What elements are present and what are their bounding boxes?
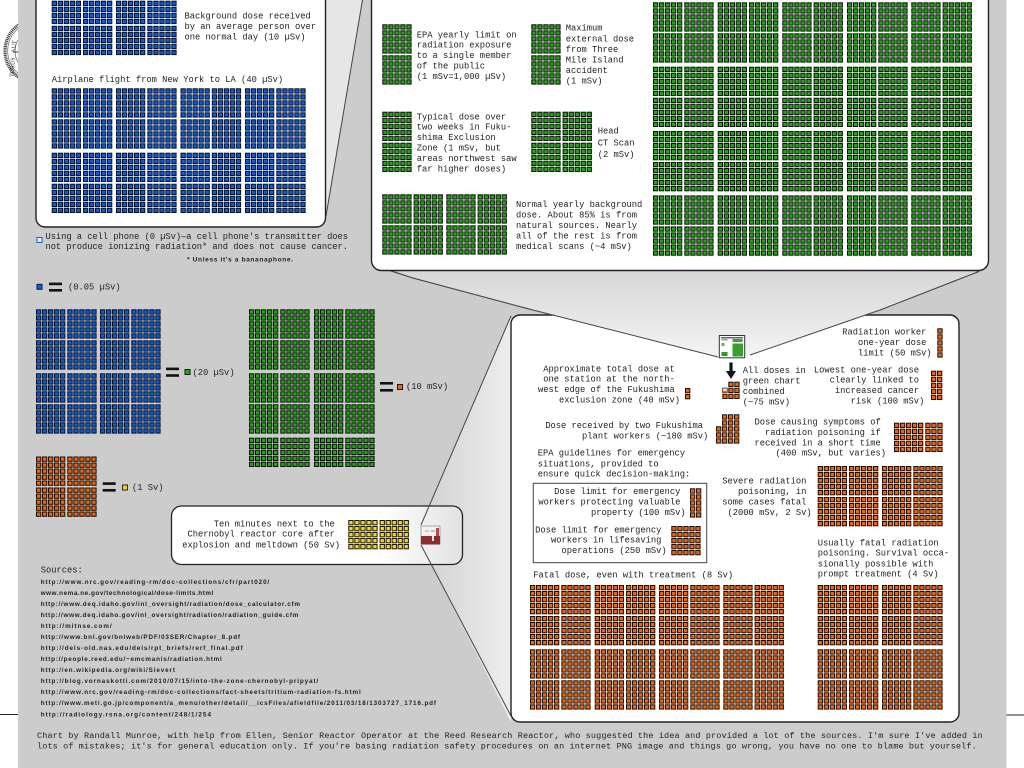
panel: green dose chart — [372, 0, 988, 270]
lifesaving text: workers in lifesaving — [551, 536, 661, 546]
Fukushima exclusion zone blocks — [383, 112, 411, 172]
north-west station text: exclusion zone (40 mSv) — [559, 395, 680, 405]
lifesaving cells — [672, 526, 700, 555]
normal yearly background text: medical scans (~4 mSv) — [516, 242, 632, 252]
Three Mile Island text: Mile Island — [566, 55, 624, 65]
all doses in green chart text: (~75 mSv) — [743, 397, 790, 407]
head CT blocks — [532, 112, 591, 172]
Fukushima exclusion zone text: two weeks in Fuku- — [417, 123, 511, 133]
severe poisoning text: some cases fatal — [722, 498, 806, 508]
severe poisoning blocks — [818, 466, 942, 526]
usually fatal text: poisoning. Survival occa- — [818, 549, 949, 559]
Chernobyl yellow blocks — [349, 520, 408, 549]
EPA limit text: EPA yearly limit on — [417, 30, 517, 40]
Fukushima exclusion zone text: Zone (1 mSv, but — [417, 144, 501, 154]
source URLs: www.nema.ne.gov/technological/dose-limits.html — [40, 590, 214, 597]
source URLs: http://www.nrc.gov/reading-rm/doc-collections/fact-sheets/tritium-radiation-fs.html — [41, 689, 361, 696]
symptoms text: received in a short time — [754, 438, 881, 448]
cancer risk text: increased cancer — [835, 386, 919, 396]
severe poisoning text: (2000 mSv, 2 Sv) — [728, 508, 812, 518]
fatal dose heading: Fatal dose, even with treatment (8 Sv) — [533, 571, 733, 581]
callout wedge: Chernobyl icon to orange panel — [421, 315, 511, 722]
cell phone note — [37, 232, 353, 252]
legend: 500 green cells equal one orange cell: (10 mSv) — [406, 382, 448, 392]
source URLs: http://people.reed.edu/~emcmanis/radiation.html — [41, 656, 222, 663]
usually fatal text: prompt treatment (4 Sv) — [818, 570, 939, 580]
worker limit text: limit (50 mSv) — [858, 348, 932, 358]
worker limit text: one-year dose — [858, 338, 926, 348]
callout wedge: base under green panel — [372, 265, 987, 357]
normal yearly background text: Normal yearly background — [516, 200, 642, 210]
usually fatal text: sionally possible with — [818, 559, 933, 569]
footnote: * Unless it's a bananaphone. — [187, 256, 293, 264]
source URLs: http://www.deq.idaho.gov/inl_oversight/radiation/radiation_guide.cfm — [41, 612, 299, 619]
normal yearly background blocks — [383, 195, 506, 254]
EPA limit text: (1 mSv=1,000 µSv) — [417, 72, 506, 82]
green chart combined cells — [723, 382, 739, 398]
symptoms cells — [894, 423, 942, 452]
plant workers text: Dose received by two Fukushima — [545, 421, 703, 431]
all doses in green chart text: green chart — [743, 376, 801, 386]
source URLs: http://dels-old.nas.edu/dels/rpt_briefs/rerf_final.pdf — [41, 645, 244, 652]
cancer risk cells — [932, 371, 942, 400]
legend: blue cell value — [37, 283, 121, 293]
EPA emergency guideline text: EPA guidelines for emergency — [538, 449, 685, 459]
Chernobyl text: explosion and meltdown (50 Sv) — [182, 540, 340, 550]
valuable property text: property (100 mSv) — [591, 508, 686, 518]
lifesaving text: operations (250 mSv) — [561, 546, 667, 556]
background dose text: one normal day (10 µSv) — [184, 32, 306, 42]
lifesaving text: Dose limit for emergency — [535, 525, 661, 535]
background dose text: by an average person over — [184, 22, 316, 32]
Chernobyl text: Chernobyl reactor core after — [187, 530, 335, 540]
seal emblem at page edge: TORUS · AUT — [10, 40, 18, 77]
cell phone text: not produce ionizing radiation* and does not cause cancer. — [46, 242, 348, 252]
sources heading: Sources: — [41, 565, 83, 575]
callout wedge over panel — [393, 272, 979, 357]
legend: 100 orange cells equal one yellow cell — [36, 457, 164, 516]
EPA emergency guideline text: ensure quick decision-making: — [538, 470, 690, 480]
Three Mile Island text: (1 mSv) — [566, 77, 603, 87]
source URLs: http://en.wikipedia.org/wiki/Sievert — [41, 667, 176, 674]
source URLs: http://www.nrc.gov/reading-rm/doc-collections/cfr/part020/ — [41, 579, 270, 586]
credit footer: lots of mistakes; it's for general education only. If you're basing radiation safety procedures on an internet PNG image and things go wrong, you have no one to blame but yourself. — [37, 742, 977, 752]
airplane flight heading: Airplane flight from New York to LA (40 µSv) — [52, 75, 283, 85]
icon: mini green chart — [719, 336, 745, 358]
Three Mile Island text: accident — [566, 66, 608, 76]
valuable property text: workers protecting valuable — [538, 498, 680, 508]
background dose blocks — [52, 0, 176, 55]
Three Mile Island text: from Three — [566, 45, 618, 55]
normal yearly background text: all of the rest is from — [516, 231, 637, 241]
usually fatal text: Usually fatal radiation — [818, 538, 939, 548]
edge rules — [0, 714, 1024, 716]
airplane flight blocks — [52, 89, 305, 212]
seal emblem at page edge — [5, 19, 69, 83]
Fukushima exclusion zone text: shima Exclusion — [417, 133, 496, 143]
credit footer: Chart by Randall Munroe, with help from Ellen, Senior Reactor Operator at the Reed Research Reactor, who suggested the idea and provided a lot of the sources. I'm sure I've added in — [37, 731, 983, 741]
plant workers cells — [716, 415, 739, 443]
valuable property cells — [690, 489, 701, 517]
head CT text: CT Scan — [598, 138, 635, 148]
sources list — [40, 565, 437, 718]
legend: 100 orange cells equal one yellow cell: (1 Sv) — [132, 483, 164, 493]
symptoms text: (400 mSv, but varies) — [776, 449, 886, 459]
legend: 400 blue cells equal one green cell: (20 µSv) — [192, 368, 235, 378]
source URLs: http://blog.vornaskotti.com/2010/07/15/into-the-zone-chernobyl-pripyat/ — [41, 678, 319, 685]
head CT text: (2 mSv) — [598, 150, 635, 160]
panel: blue microsievert doses — [36, 0, 326, 227]
panel: Chernobyl dose — [172, 506, 462, 564]
Three Mile Island text: external dose — [566, 34, 634, 44]
source URLs: http://www.bnl.gov/bnlweb/PDF/03SER/Chapter_8.pdf — [41, 634, 241, 641]
plant workers text: plant workers (~180 mSv) — [582, 431, 708, 441]
symptoms text: radiation poisoning if — [765, 428, 881, 438]
legend: blue cell value: (0.05 µSv) — [68, 283, 121, 293]
Fukushima exclusion zone text: far higher doses) — [417, 164, 506, 174]
Three Mile Island text: Maximum — [566, 24, 603, 34]
all doses in green chart text: combined — [743, 387, 785, 397]
EPA emergency guideline text: situations, provided to — [538, 459, 659, 469]
north-west station text: one station at the north- — [543, 375, 675, 385]
legend: 400 blue cells equal one green cell — [36, 310, 235, 433]
background dose text: Background dose received — [184, 12, 311, 22]
normal yearly background text: natural sources. Nearly — [516, 221, 637, 231]
Fukushima exclusion zone text: Typical dose over — [417, 112, 506, 122]
north-west station cells — [686, 388, 690, 399]
worker limit text: Radiation worker — [842, 328, 926, 338]
source URLs: http://www.deq.idaho.gov/inl_oversight/radiation/dose_calculator.cfm — [41, 601, 300, 608]
callout wedge: blue panel — [320, 0, 362, 216]
worker limit cells — [938, 329, 942, 357]
symptoms text: Dose causing symptoms of — [754, 418, 881, 428]
valuable property text: Dose limit for emergency — [554, 487, 680, 497]
source URLs: http://radiology.rsna.org/content/248/1/254 — [41, 712, 211, 718]
box: emergency dose limits — [533, 483, 707, 563]
icon: mini orange chart — [421, 526, 440, 544]
Three Mile Island blocks — [532, 25, 560, 84]
source URLs — [40, 579, 437, 718]
big green chart: 40 mSv — [654, 3, 971, 255]
EPA limit text: of the public — [417, 61, 485, 71]
north-west station text: Approximate total dose at — [543, 364, 675, 374]
severe poisoning text: Severe radiation — [722, 477, 806, 487]
arrow: down from icon — [726, 362, 736, 379]
panel: orange dose chart — [393, 272, 979, 722]
EPA limit text: to a single member — [417, 51, 511, 61]
cell phone text: Using a cell phone (0 µSv)—a cell phone's transmitter does — [46, 232, 348, 242]
cancer risk text: clearly linked to — [830, 376, 919, 386]
north-west station text: west edge of the Fukushima — [538, 385, 675, 395]
source URLs: http://mitnse.com/ — [41, 623, 112, 630]
Fukushima exclusion zone text: areas northwest saw — [417, 154, 517, 164]
source URLs: http://www.meti.go.jp/component/a_menu/other/detail/__icsFiles/afieldfile/2011/03/18/1303727_1716.pdf — [41, 700, 437, 707]
all doses in green chart text: All doses in — [743, 366, 806, 376]
callout lines: Chernobyl — [421, 316, 511, 716]
normal yearly background text: dose. About 85% is from — [516, 210, 637, 220]
fatal dose blocks — [530, 586, 783, 709]
head CT text: Head — [598, 127, 619, 137]
severe poisoning text: poisoning, in — [738, 487, 806, 497]
EPA limit text: radiation exposure — [417, 41, 511, 51]
legend: 500 green cells equal one orange cell — [250, 310, 448, 466]
cancer risk text: Lowest one-year dose — [814, 365, 919, 375]
EPA limit blocks — [383, 25, 411, 84]
Chernobyl text: Ten minutes next to the — [214, 519, 335, 529]
icon: hollow cell — [37, 238, 42, 242]
cancer risk text: risk (100 mSv) — [851, 396, 924, 406]
usually fatal blocks — [818, 586, 942, 709]
